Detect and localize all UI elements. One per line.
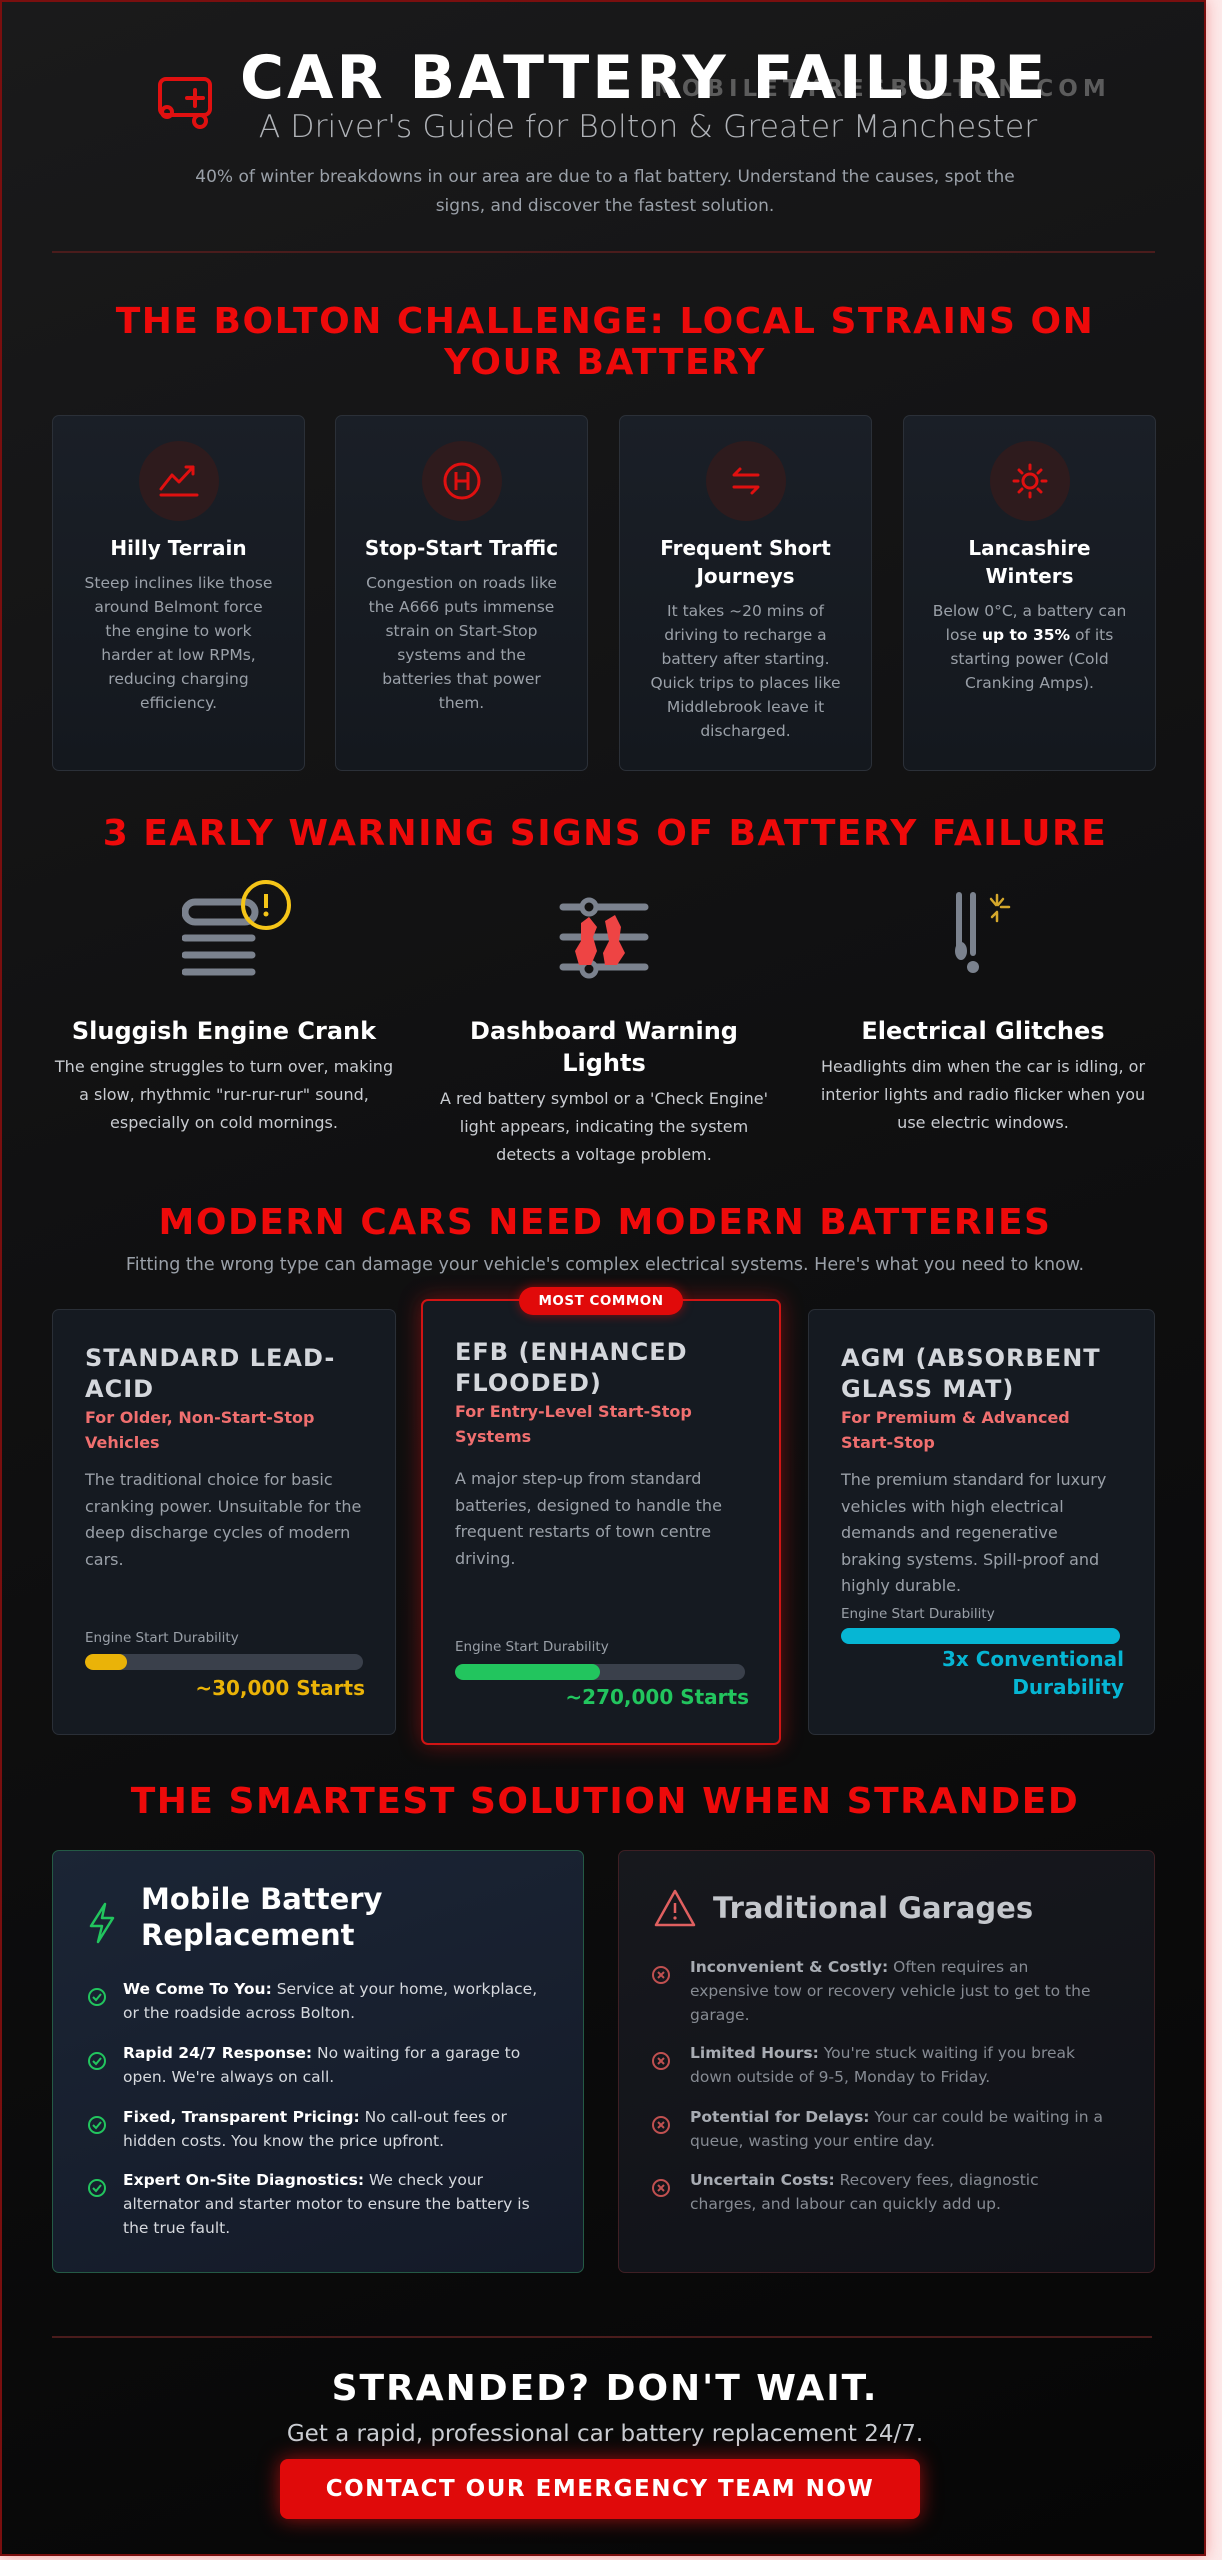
panel: mobile replacement [52,1850,584,2273]
icon: sliders with red warning [560,898,648,978]
card: stop-start [335,415,588,771]
heading: warning signs: 3 EARLY WARNING SIGNS OF BATTERY FAILURE [103,813,1107,854]
badge: MOST COMMON [538,1293,664,1309]
battery card: EFB (most common): frequent restarts of town centre [455,1522,711,1541]
icon: warning triangle [654,1890,696,1926]
benefits list: open. We're always on call. [123,2068,334,2086]
icon: arrows [706,441,786,521]
sign: dashboard lights: detects a voltage problem. [496,1145,712,1164]
icon: H circle [422,441,502,521]
card: stop-start: batteries that power [382,670,541,688]
sign: sluggish crank: The engine struggles to turn over, making [55,1057,393,1076]
intro text: signs, and discover the fastest solution. [436,196,774,216]
battery card: EFB (most common): EFB (ENHANCED [455,1338,688,1366]
card: short journeys: driving to recharge a [664,626,827,644]
card: winters [903,415,1156,771]
battery card: standard: STANDARD LEAD- [85,1344,335,1372]
card: short journeys: It takes ~20 mins of [667,602,824,620]
battery card: standard: cars. [85,1550,124,1568]
card: winters: starting power (Cold [950,650,1109,668]
battery card: EFB (most common): driving. [455,1548,515,1568]
drawbacks list: Potential for Delays: Your car could be waiting in a [690,2108,1103,2126]
title: CAR BATTERY FAILURE [240,43,1048,113]
icon: crank lines [182,880,291,976]
battery card: AGM: Durability [1012,1675,1124,1699]
battery card: AGM: highly durable. [841,1576,961,1595]
card: stop-start: them. [439,694,484,712]
drawbacks list: queue, wasting your entire day. [690,2132,935,2150]
card: short journeys: Frequent Short [660,536,831,560]
card: stop-start: the A666 puts immense [369,598,554,616]
drawbacks list: charges, and labour can quickly add up. [690,2195,1001,2213]
card: hilly terrain: around Belmont force [94,598,263,616]
battery card: EFB (most common): batteries, designed to handle the [455,1496,722,1514]
CTA button [280,2459,920,2519]
bar: 270k [455,1664,745,1680]
benefits list: Expert On-Site Diagnostics: We check your [123,2171,483,2189]
sign: sluggish crank [54,880,393,1132]
card: hilly terrain: efficiency. [140,694,217,712]
benefits list: hidden costs. You know the price upfront. [123,2132,444,2150]
panel: traditional garages [618,1850,1155,2273]
benefits list [88,1980,537,2237]
card: short journeys [619,415,872,771]
battery card: standard: ~30,000 Starts [195,1676,365,1700]
battery card: EFB (most common): A major step-up from standard [455,1469,701,1488]
battery card: standard: deep discharge cycles of modern [85,1523,350,1542]
card: hilly terrain: harder at low RPMs, [101,646,256,664]
battery card: AGM: braking systems. Spill-proof and [841,1550,1099,1568]
CTA subtext: Get a rapid, professional car battery replacement 24/7. [287,2421,923,2447]
drawbacks list: Uncertain Costs: Recovery fees, diagnostic [690,2171,1039,2189]
benefits list: alternator and starter motor to ensure the battery is [123,2195,530,2213]
card: hilly terrain: Steep inclines like those [85,574,272,592]
battery card: EFB (most common) [421,1299,781,1745]
battery card: standard: Vehicles [85,1433,160,1452]
panel: mobile replacement: Replacement [141,1918,355,1952]
badge [519,1287,683,1315]
card: stop-start: Stop-Start Traffic [365,536,558,560]
subtitle: A Driver's Guide for Bolton & Greater Manchester [259,109,1037,145]
benefits list: or the roadside across Bolton. [123,2004,355,2022]
card: short journeys: Middlebrook leave it [667,698,824,716]
sign: sluggish crank: a slow, rhythmic "rur-rur-rur" sound, [79,1085,369,1104]
heading: bolton challenge [116,301,1094,383]
benefits list: the true fault. [123,2219,230,2237]
header: icon [158,77,212,129]
battery card: AGM: AGM (ABSORBENT [841,1344,1101,1372]
battery card: standard: cranking power. Unsuitable for the [85,1496,361,1516]
CTA button: CONTACT OUR EMERGENCY TEAM NOW [326,2476,874,2502]
sign: dashboard lights: Dashboard Warning [470,1017,738,1045]
drawbacks list: Limited Hours: You're stuck waiting if you break [690,2044,1075,2062]
bar: 30k [85,1654,363,1670]
icon: stalk with sparks [955,892,1010,973]
intro text: 40% of winter breakdowns in our area are due to a flat battery. Understand the causes, spot the [195,167,1015,187]
sign: sluggish crank: especially on cold mornings. [110,1113,338,1132]
icon: lightning [90,1902,114,1944]
battery card: EFB (most common): Systems [455,1427,531,1446]
card: stop-start: Congestion on roads like [366,574,557,592]
watermark: MOBILETYRESBOLTON.COM [654,76,1111,102]
drawbacks list: garage. [690,2006,750,2024]
benefits list: Fixed, Transparent Pricing: No call-out fees or [123,2108,507,2126]
benefits list: Rapid 24/7 Response: No waiting for a garage to [123,2044,520,2062]
drawbacks list: expensive tow or recovery vehicle just to get to the [690,1982,1090,2000]
card: short journeys: discharged. [700,722,791,740]
battery card: standard: Engine Start Durability [85,1630,239,1646]
card: stop-start: strain on Start-Stop [385,622,538,640]
battery card: EFB (most common): ~270,000 Starts [565,1685,749,1709]
battery card: EFB (most common): Engine Start Durability [455,1639,609,1655]
drawbacks list: Inconvenient & Costly: Often requires an [690,1958,1028,1976]
card: hilly terrain [52,415,305,771]
card: winters: Winters [985,564,1074,588]
battery card: EFB (most common): For Entry-Level Start-Stop [455,1402,692,1421]
battery card: standard: The traditional choice for basic [85,1470,333,1489]
sign: electrical glitches: use electric windows. [897,1113,1069,1132]
battery card: AGM: GLASS MAT) [841,1375,1014,1403]
card: winters: lose up to 35% of its [946,626,1113,644]
panel: traditional garages: Traditional Garages [713,1891,1033,1925]
sign: electrical glitches: Electrical Glitches [861,1017,1105,1045]
heading: modern batteries: MODERN CARS NEED MODERN BATTERIES [159,1202,1051,1243]
sign: dashboard lights: A red battery symbol or a 'Check Engine' [440,1089,768,1108]
panel: mobile replacement: Mobile Battery [141,1882,382,1916]
heading: bolton challenge: THE BOLTON CHALLENGE: LOCAL STRAINS ON [116,301,1094,342]
battery card: AGM: The premium standard for luxury [841,1470,1106,1489]
heading: bolton challenge: YOUR BATTERY [444,342,766,383]
card: hilly terrain: Hilly Terrain [110,536,247,560]
drawbacks list: down outside of 9-5, Monday to Friday. [690,2068,990,2086]
drawbacks list [652,1958,1103,2213]
battery card: AGM: For Premium & Advanced [841,1408,1070,1427]
card: winters: Lancashire [968,536,1091,560]
card: hilly terrain: the engine to work [105,622,252,640]
card: short journeys: Quick trips to places like [650,674,841,692]
card: winters: Cranking Amps). [965,674,1094,692]
battery card: AGM: vehicles with high electrical [841,1496,1064,1516]
battery card: standard: For Older, Non-Start-Stop [85,1408,314,1427]
sign: electrical glitches [821,892,1146,1132]
sign: electrical glitches: interior lights and radio flicker when you [821,1085,1145,1104]
icon: hill chart [139,441,219,521]
battery card: standard: ACID [85,1375,154,1403]
battery card: EFB (most common): FLOODED) [455,1369,602,1397]
card: winters: Below 0°C, a battery can [933,602,1126,620]
heading: smartest solution: THE SMARTEST SOLUTION WHEN STRANDED [131,1781,1079,1822]
bar: 3x [841,1628,1120,1644]
battery card: AGM: Start-Stop [841,1433,935,1452]
icon: sun [990,441,1070,521]
battery card: AGM: Engine Start Durability [841,1606,995,1622]
benefits list: We Come To You: Service at your home, workplace, [123,1980,537,1998]
battery card: AGM: 3x Conventional [942,1647,1124,1671]
card: short journeys: battery after starting. [661,650,830,668]
intro text [195,167,1015,216]
battery card: AGM: demands and regenerative [841,1523,1058,1542]
subheading: Fitting the wrong type can damage your vehicle's complex electrical systems. Here's what you need to know. [126,1255,1084,1275]
card: stop-start: systems and the [397,646,526,664]
sign: dashboard lights [440,898,768,1164]
sign: dashboard lights: Lights [562,1049,646,1077]
sign: sluggish crank: Sluggish Engine Crank [72,1017,376,1045]
sign: electrical glitches: Headlights dim when the car is idling, or [821,1057,1145,1076]
battery card: standard [52,1309,396,1735]
card: hilly terrain: reducing charging [108,670,249,688]
sign: dashboard lights: light appears, indicating the system [460,1117,748,1136]
battery card: AGM [808,1309,1155,1735]
card: short journeys: Journeys [696,564,795,588]
CTA heading: STRANDED? DON'T WAIT. [332,2368,878,2409]
